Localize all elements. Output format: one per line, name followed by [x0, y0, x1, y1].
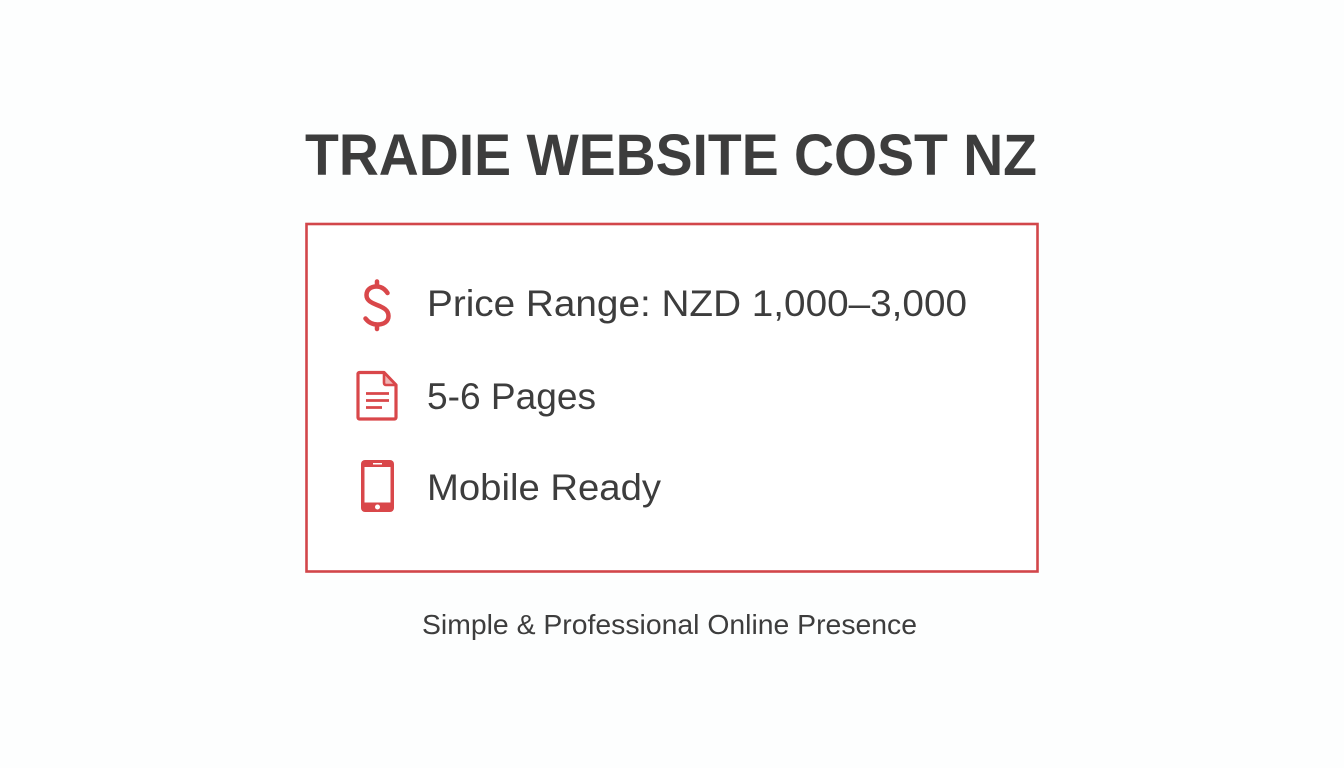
pages text: 5-6 Pages — [427, 376, 596, 417]
title: TRADIE WEBSITE COST NZ — [305, 123, 1037, 188]
icon: mobile phone — [361, 460, 394, 512]
icon: document — [358, 372, 396, 419]
icon: dollar sign — [366, 282, 388, 329]
price range text: Price Range: NZD 1,000–3,000 — [427, 283, 967, 324]
panel: website details — [306, 224, 1038, 572]
mobile ready text: Mobile Ready — [427, 467, 662, 508]
tagline: Simple & Professional Online Presence — [422, 609, 917, 640]
